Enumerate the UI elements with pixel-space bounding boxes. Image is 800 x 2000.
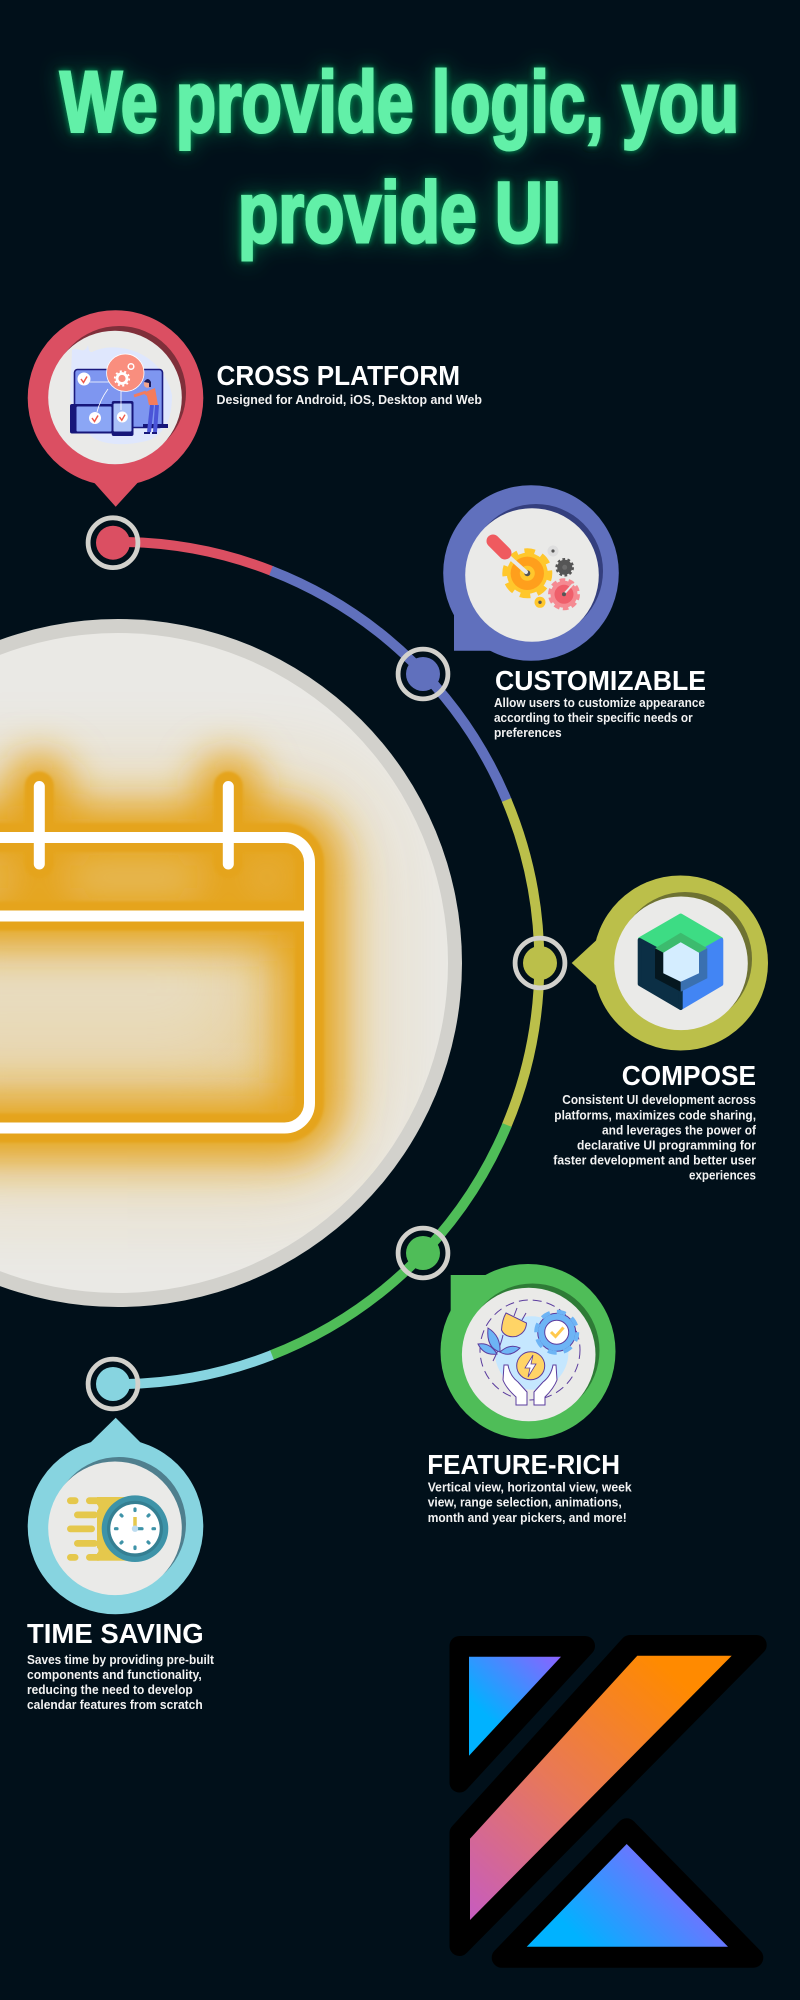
pin marker xyxy=(28,1418,203,1614)
description: components and functionality, xyxy=(27,1667,202,1682)
pin marker xyxy=(443,485,619,661)
description: platforms, maximizes code sharing, xyxy=(554,1108,756,1122)
icon: fast clock xyxy=(67,1495,168,1562)
panel: cross platform xyxy=(28,310,482,507)
description: according to their specific needs or xyxy=(494,710,693,725)
description: reducing the need to develop xyxy=(27,1682,193,1697)
description: and leverages the power of xyxy=(602,1122,757,1138)
description: Allow users to customize appearance xyxy=(494,695,705,710)
pin marker xyxy=(440,1264,616,1439)
description: declarative UI programming for xyxy=(577,1138,756,1152)
description: Consistent UI development across xyxy=(562,1092,756,1107)
timeline arc xyxy=(113,542,539,1384)
icon: gears and screwdriver xyxy=(493,541,578,608)
heading: FEATURE-RICH xyxy=(427,1449,620,1480)
panel: feature-rich xyxy=(427,1264,633,1525)
description: Saves time by providing pre-built xyxy=(27,1652,215,1667)
node: feature-rich xyxy=(398,1228,448,1278)
pin marker xyxy=(28,310,203,507)
node: time saving xyxy=(88,1359,138,1409)
icon: plug, gear, leaves, energy xyxy=(478,1300,580,1405)
description: experiences xyxy=(689,1168,756,1182)
heading: COMPOSE xyxy=(622,1060,756,1091)
node: cross platform xyxy=(88,518,138,568)
description: Designed for Android, iOS, Desktop and Web xyxy=(216,392,482,407)
node: compose xyxy=(515,938,565,988)
description: calendar features from scratch xyxy=(27,1697,203,1712)
heading: TIME SAVING xyxy=(27,1618,204,1649)
description: Vertical view, horizontal view, week xyxy=(428,1480,633,1494)
icon: devices and gear xyxy=(70,345,172,444)
description: month and year pickers, and more! xyxy=(428,1510,627,1525)
title: provide UI xyxy=(238,165,561,261)
description xyxy=(428,1480,633,1525)
heading: CROSS PLATFORM xyxy=(216,360,460,391)
title xyxy=(60,54,739,261)
icon: jetpack compose logo xyxy=(640,916,721,1008)
description xyxy=(553,1092,757,1182)
description xyxy=(494,695,705,740)
description: view, range selection, animations, xyxy=(428,1494,622,1510)
calendar glow xyxy=(0,786,310,1128)
panel: compose xyxy=(553,876,768,1182)
panel: customizable xyxy=(443,485,706,740)
description: faster development and better user xyxy=(553,1152,756,1168)
node: customizable xyxy=(398,649,448,699)
icon: kotlin logo xyxy=(460,1645,757,1958)
pin marker xyxy=(572,876,768,1050)
description: preferences xyxy=(494,725,562,740)
central calendar disc xyxy=(0,619,462,1307)
panel: time saving xyxy=(27,1418,215,1712)
heading: CUSTOMIZABLE xyxy=(495,665,706,696)
icon: calendar xyxy=(0,786,310,1128)
description xyxy=(27,1652,215,1712)
